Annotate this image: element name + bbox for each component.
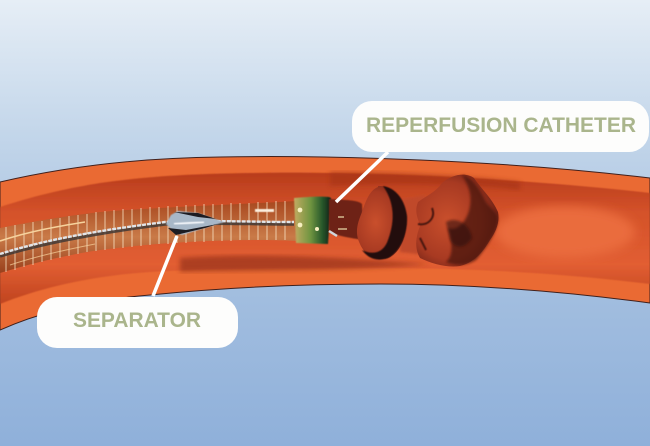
catheter tip: [294, 197, 331, 244]
separator bulb: [166, 211, 224, 235]
callout: separator: [37, 297, 238, 348]
separator wire: [0, 211, 294, 256]
callout: separator: SEPARATOR: [73, 309, 201, 332]
bright lumen glow: [495, 206, 635, 258]
extending wire: [329, 199, 364, 240]
thrombus clot: [416, 175, 499, 267]
reperfusion catheter tube: [0, 201, 296, 273]
callout: reperfusion catheter: REPERFUSION CATHETER: [366, 114, 636, 137]
clot neck: [400, 195, 425, 255]
tube highlights: [0, 222, 85, 241]
vessel: [0, 157, 650, 330]
vessel lumen: [0, 173, 650, 304]
shadow under catheter: [180, 256, 430, 272]
separator pointer: [153, 236, 177, 296]
thrombus fragment: [357, 186, 407, 260]
shadow along upper lumen: [330, 172, 520, 190]
reperfusion catheter pointer: [336, 152, 388, 202]
callout: reperfusion catheter: [352, 101, 649, 152]
tube coil lines: [6, 201, 285, 272]
vessel outer wall: [0, 157, 650, 330]
